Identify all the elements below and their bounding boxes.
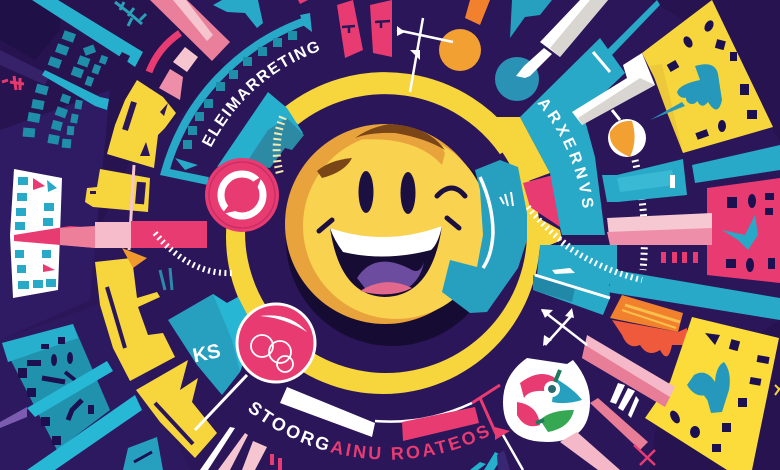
panel: cyan fragment bottom xyxy=(123,437,163,470)
icon: pink lollipop badge xyxy=(195,304,315,430)
panel: yellow block upper-left xyxy=(107,80,176,168)
icon: round emblem xyxy=(503,358,590,442)
ticks: dashed cyan overlay xyxy=(562,243,642,280)
icon: red scribble left xyxy=(2,76,24,90)
panel: cyan wedge block with label: KS xyxy=(191,340,223,367)
panel: top-left cyan band xyxy=(32,0,143,67)
eye: right xyxy=(400,172,416,214)
mouth xyxy=(330,226,442,297)
panel: lower-left blue panel xyxy=(2,324,110,450)
banner: pink bottom xyxy=(402,385,510,441)
icon: white cross xyxy=(397,18,453,92)
shapes: pink pieces xyxy=(159,47,198,100)
arc: pink xyxy=(149,33,180,72)
ticks: small pink xyxy=(661,252,698,263)
shape: cyan teardrop top xyxy=(510,0,552,38)
bar: cyan upper right xyxy=(692,145,780,183)
icon: syringe and ball xyxy=(495,0,608,101)
shape: orange and red cloud xyxy=(610,295,687,356)
icon: orange and white ball xyxy=(608,110,646,157)
bar: pink horizontal xyxy=(14,221,207,248)
panel: yellow key block xyxy=(85,169,150,212)
icon: yellow star right xyxy=(775,385,780,395)
bar: cyan right lower xyxy=(607,270,780,320)
ticks: dashed arcs xyxy=(155,117,644,280)
panel: cyan strip left xyxy=(42,70,109,110)
panel: pink block top xyxy=(150,0,230,61)
text: bottom curved label: STOORGAINU ROATEOS xyxy=(248,402,489,460)
panel: pink right xyxy=(707,178,780,283)
heading: curved label: ELEIMARRETING xyxy=(202,42,320,147)
bar: pale pink diagonal xyxy=(582,335,675,407)
lines: bottom center stripes xyxy=(470,435,523,470)
stick: pale vertical xyxy=(129,165,134,250)
icon: orange ball xyxy=(439,29,481,71)
icon row: teal arc squares xyxy=(183,31,297,149)
shapes: pink tabs top xyxy=(298,0,392,58)
panel: yellow upper right xyxy=(642,0,773,153)
bar: pink arm lower xyxy=(560,398,655,470)
face: smiley xyxy=(285,124,489,324)
shape: orange rect top xyxy=(465,0,490,25)
eye: left xyxy=(358,171,374,213)
bar: pale pink right xyxy=(607,213,712,245)
bars: three white stripes xyxy=(610,383,639,418)
bars: bottom stripes xyxy=(200,427,282,470)
arc: white banner bottom xyxy=(280,387,472,437)
icon: white cross arrows xyxy=(541,308,587,346)
eye: wink xyxy=(437,188,465,196)
panel: yellow lower right xyxy=(645,317,779,470)
panel: cyan arch with label xyxy=(520,0,660,235)
panel: cyan block right xyxy=(602,159,687,202)
panel: inner cyan wedge xyxy=(217,92,304,168)
panel: cyan wedge block with label xyxy=(168,294,255,395)
icon: cyan leaf upper xyxy=(650,64,722,120)
panel: lower-left yellow block xyxy=(95,248,175,381)
panel: cyan arch with label: ARXERNVS xyxy=(537,100,594,208)
wedge: pink ring segment xyxy=(523,175,560,227)
panel: cyan block center right xyxy=(533,245,617,315)
panel: bottom-left yellow block xyxy=(136,360,217,458)
circle: dark halo behind face xyxy=(286,134,498,346)
icon: teal scribble top xyxy=(115,2,146,26)
icon: telephone receiver xyxy=(442,160,527,313)
panel: white block upper right xyxy=(572,53,655,125)
panel: teal squares grid xyxy=(23,30,108,148)
panel: cyan top teardrop xyxy=(213,0,263,28)
icon: cyan leaf lower xyxy=(687,362,730,413)
ring: yellow main ring xyxy=(226,80,562,394)
panel: cyan arc band xyxy=(165,13,312,181)
bars: cyan strips lower-left xyxy=(0,361,142,470)
icon: red refresh badge xyxy=(205,158,279,232)
panel: white card left xyxy=(10,169,62,298)
